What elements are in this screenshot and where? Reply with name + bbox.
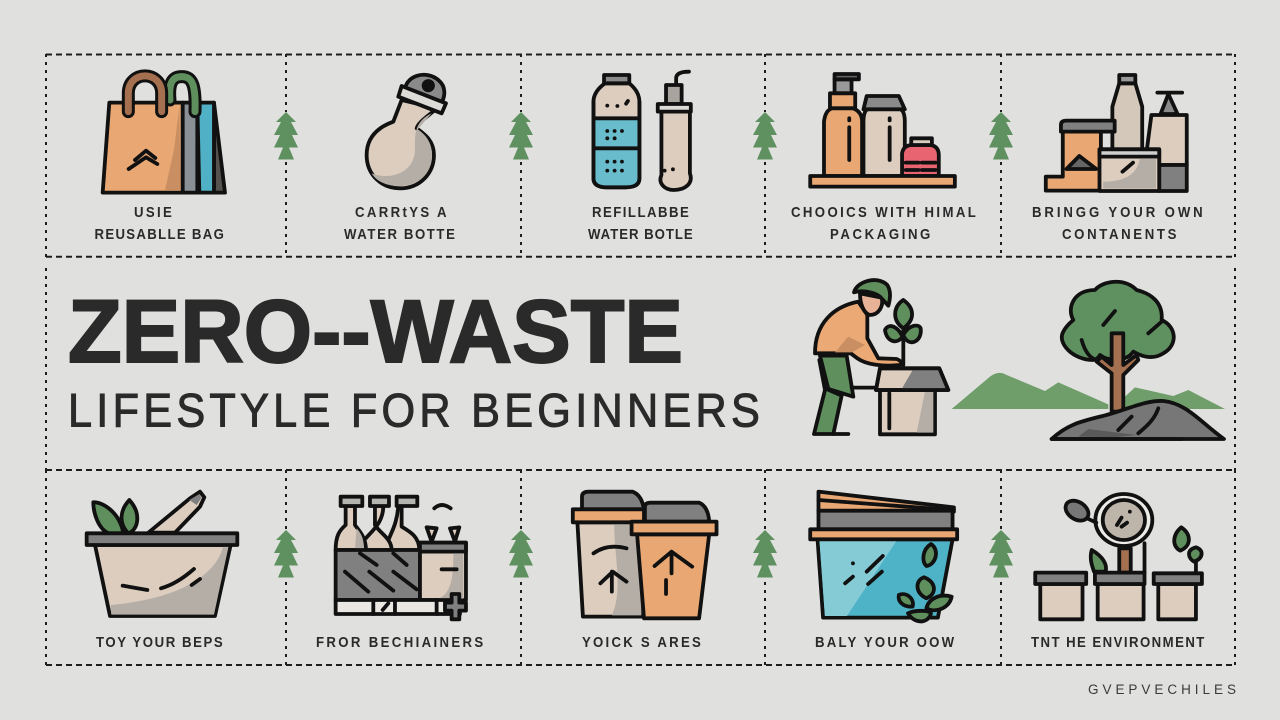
subtitle: LIFESTYLE FOR BEGINNERS bbox=[68, 384, 760, 437]
label: choose minimal packaging bbox=[791, 203, 976, 242]
icon: containers group bbox=[1046, 75, 1187, 191]
icon: tree on mound bbox=[1052, 282, 1224, 439]
hills bbox=[952, 373, 1225, 409]
tree divider 4 bottom bbox=[989, 530, 1013, 578]
panel: own containers bbox=[1032, 75, 1203, 242]
illustration: person planting and tree bbox=[814, 280, 1225, 439]
label: yoick s ares: YOICK S ARES bbox=[582, 633, 701, 650]
tree divider 4 top bbox=[989, 112, 1013, 160]
panel: reusable bag bbox=[94, 76, 225, 242]
icon: refillable bottles bbox=[593, 72, 691, 190]
panel: pots and magnifier bbox=[1031, 494, 1205, 650]
label: tnt he environment: TNT HE ENVIRONMENT bbox=[1031, 633, 1205, 650]
title: ZERO--WASTE bbox=[68, 281, 683, 381]
panel: minimal packaging bbox=[791, 74, 976, 242]
panel: refillable bottle bbox=[588, 72, 693, 242]
panel: glass container bbox=[810, 492, 957, 650]
label: carry a water bottle bbox=[344, 203, 455, 242]
tree divider 2 bottom bbox=[509, 530, 533, 578]
panel: bottles in crate bbox=[316, 497, 483, 650]
label: choose minimal packaging: PACKAGING bbox=[830, 225, 930, 242]
label: fror bechiainers: FROR BECHIAINERS bbox=[316, 633, 483, 650]
label: baly your oow: BALY YOUR OOW bbox=[815, 633, 955, 650]
label: use reusable bag: USIE bbox=[134, 203, 172, 220]
icon: two cups bbox=[573, 492, 717, 618]
label: bring your own containers bbox=[1032, 203, 1203, 242]
label: refillable water bottle: REFILLABBE bbox=[592, 203, 689, 220]
icon: three pots with plants bbox=[1035, 494, 1202, 619]
label: use reusable bag: REUSABLLE BAG bbox=[94, 225, 224, 242]
label: use reusable bag bbox=[94, 203, 224, 242]
tree divider 1 bottom bbox=[274, 530, 298, 578]
icon: round flask bbox=[367, 75, 446, 188]
panel: cups bbox=[573, 492, 717, 650]
icon: bowl bbox=[87, 492, 237, 616]
label: carry a water bottle: CARRtYS A bbox=[355, 203, 447, 220]
tree divider 3 bottom bbox=[753, 530, 777, 578]
label: carry a water bottle: WATER BOTTE bbox=[344, 225, 455, 242]
panel: water bottle bbox=[344, 75, 455, 242]
footer credit: GVEPVECHILES bbox=[1088, 682, 1236, 697]
icon: teal container with leaves bbox=[810, 492, 957, 621]
label: refillable water bottle bbox=[588, 203, 693, 242]
label: toy your beps: TOY YOUR BEPS bbox=[96, 633, 223, 650]
tree divider 1 top bbox=[274, 112, 298, 160]
icon: shopping bag bbox=[103, 76, 225, 193]
tree divider 2 top bbox=[509, 112, 533, 160]
label: choose minimal packaging: CHOOICS WITH HIMAL bbox=[791, 203, 976, 220]
icon: gardener with plant in box bbox=[814, 280, 948, 434]
title bbox=[68, 281, 760, 437]
label: bring your own containers: CONTANENTS bbox=[1062, 225, 1176, 242]
tree divider 3 top bbox=[753, 112, 777, 160]
icon: packaging bottles on shelf bbox=[810, 74, 955, 187]
label: refillable water bottle: WATER BOTLE bbox=[588, 225, 693, 242]
icon: bottles crate bbox=[336, 497, 466, 619]
label: bring your own containers: BRINGG YOUR OWN bbox=[1032, 203, 1203, 220]
panel: bowl with leaves bbox=[87, 492, 237, 650]
